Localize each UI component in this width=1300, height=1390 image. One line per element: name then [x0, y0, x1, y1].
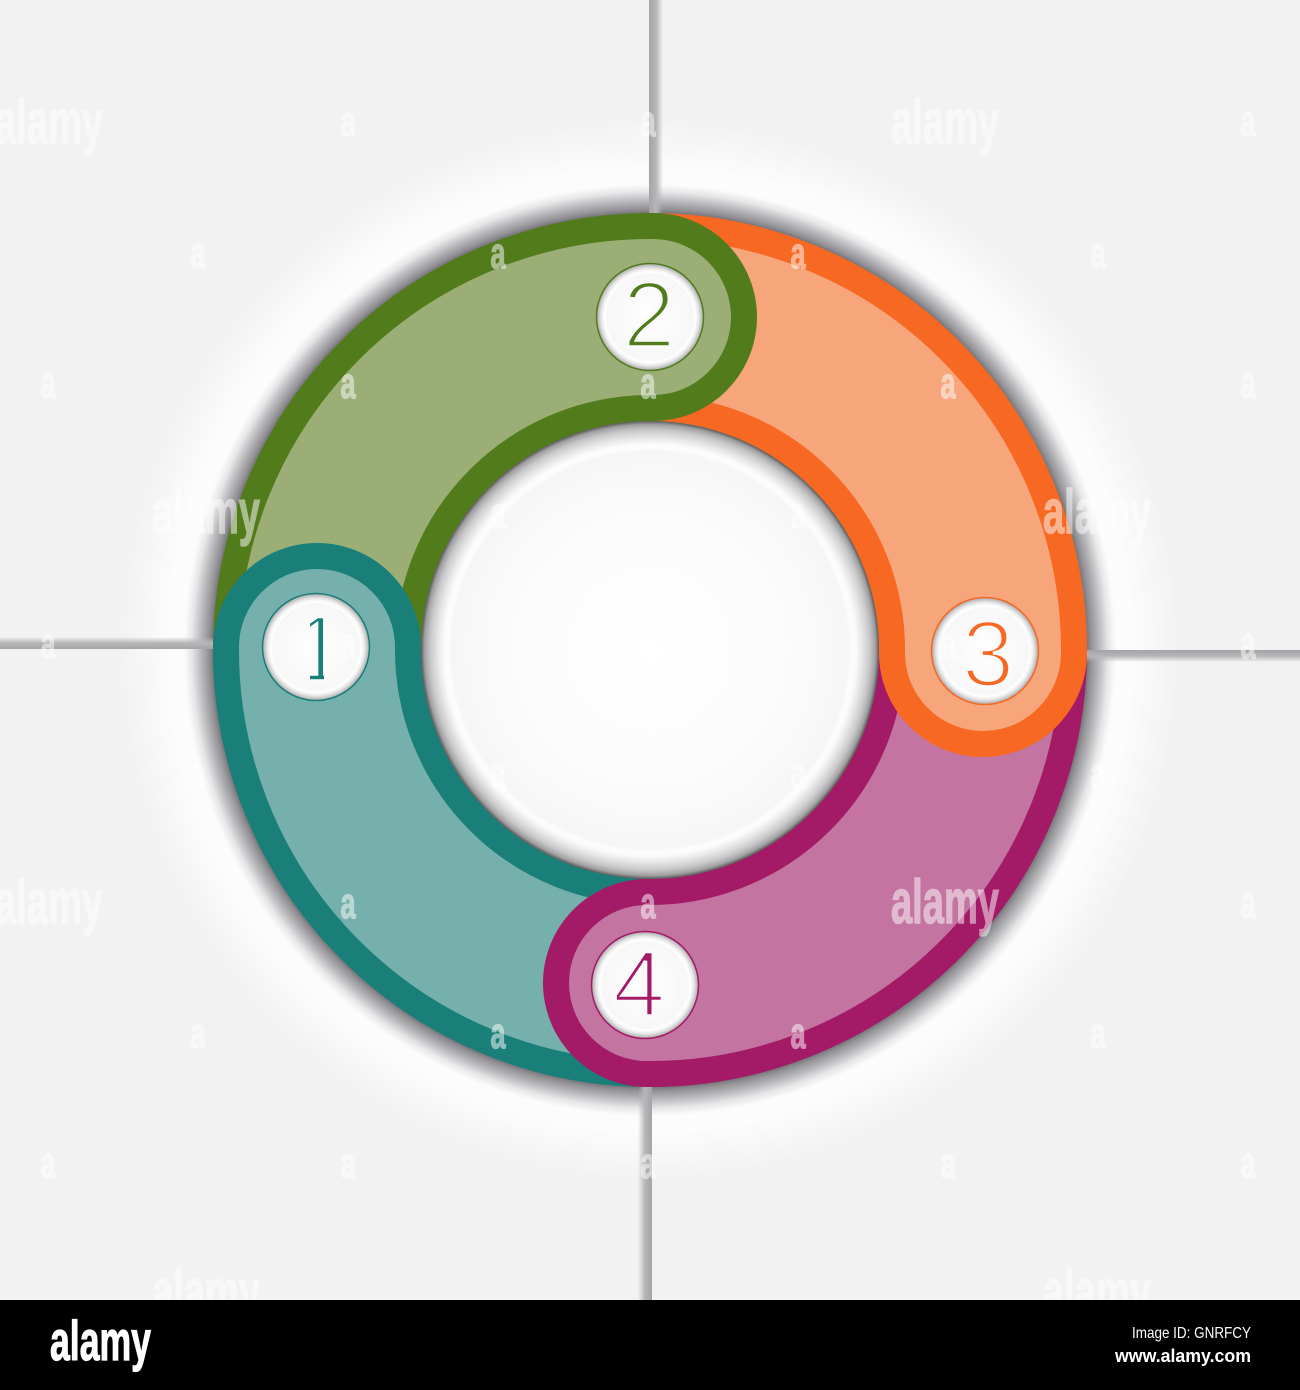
- watermarks: small: a: [490, 749, 506, 798]
- badge 2: 2: [623, 262, 675, 367]
- watermarks: small: a: [1240, 97, 1256, 146]
- watermarks: small: a: [1090, 749, 1106, 798]
- watermarks: small: a: [1240, 1139, 1256, 1188]
- watermarks: small: a: [490, 229, 506, 278]
- watermarks: small: a: [490, 1009, 506, 1058]
- center disk: [421, 421, 879, 879]
- watermarks: small: a: [640, 1139, 656, 1188]
- watermarks: small: a: [640, 359, 656, 408]
- badge 4: [592, 931, 698, 1038]
- watermarks: small: a: [1240, 619, 1256, 668]
- badge 1: 1: [293, 596, 345, 701]
- badge 4: 4: [613, 931, 665, 1036]
- watermarks: small: a: [1090, 1009, 1106, 1058]
- watermarks: small: a: [190, 749, 206, 798]
- footer image id: Image ID: GNRFCY: [1132, 1325, 1251, 1342]
- watermarks: small: a: [640, 619, 656, 668]
- watermarks: small: [40, 97, 1256, 1188]
- watermarks: small: a: [340, 879, 356, 928]
- footer logo: alamy: [50, 1309, 151, 1372]
- watermarks: small: a: [340, 619, 356, 668]
- watermarks: small: a: [790, 229, 806, 278]
- watermarks: small: a: [640, 879, 656, 928]
- watermarks: large: alamy: [152, 1258, 260, 1327]
- footer url: www.alamy.com: [1114, 1346, 1251, 1366]
- watermarks: small: a: [1240, 879, 1256, 928]
- watermarks: large: alamy: [0, 88, 103, 157]
- watermarks: small: a: [940, 619, 956, 668]
- watermarks: large: alamy: [152, 478, 260, 547]
- watermarks: small: a: [340, 1139, 356, 1188]
- watermarks: small: a: [940, 359, 956, 408]
- watermarks: small: a: [1240, 359, 1256, 408]
- badge 3: 3: [962, 601, 1014, 706]
- watermarks: small: a: [790, 489, 806, 538]
- watermarks: small: a: [1090, 229, 1106, 278]
- watermarks: small: a: [190, 1009, 206, 1058]
- watermarks: large: alamy: [1043, 1258, 1151, 1327]
- watermarks: large: alamy: [891, 868, 999, 937]
- panel: segment 1 teal: [213, 543, 647, 983]
- watermarks: small: a: [790, 749, 806, 798]
- footer bar: [0, 1300, 1300, 1390]
- watermarks: small: a: [940, 1139, 956, 1188]
- badge 1: [262, 594, 370, 701]
- watermarks: large: alamy: [891, 88, 999, 157]
- watermarks: small: a: [190, 229, 206, 278]
- watermarks: large: alamy: [1043, 478, 1151, 547]
- watermarks: small: a: [340, 359, 356, 408]
- panel: segment 3 orange: [653, 317, 983, 653]
- watermarks: large: [0, 88, 1151, 1327]
- watermarks: small: a: [40, 359, 56, 408]
- badge 3: [932, 598, 1038, 706]
- ring shadow and glow: [120, 120, 1180, 1180]
- panel: segment 2 green: [317, 317, 653, 647]
- watermarks: small: a: [490, 489, 506, 538]
- badge 2: [596, 262, 704, 370]
- watermarks: small: a: [340, 97, 356, 146]
- watermarks: small: a: [790, 1009, 806, 1058]
- watermarks: small: a: [40, 1139, 56, 1188]
- panel: segment 4 purple: [647, 653, 983, 983]
- panel: segment 4 purple head: [543, 879, 648, 1087]
- watermarks: large: alamy: [0, 868, 103, 937]
- watermarks: small: a: [40, 619, 56, 668]
- watermarks: small: a: [640, 97, 656, 146]
